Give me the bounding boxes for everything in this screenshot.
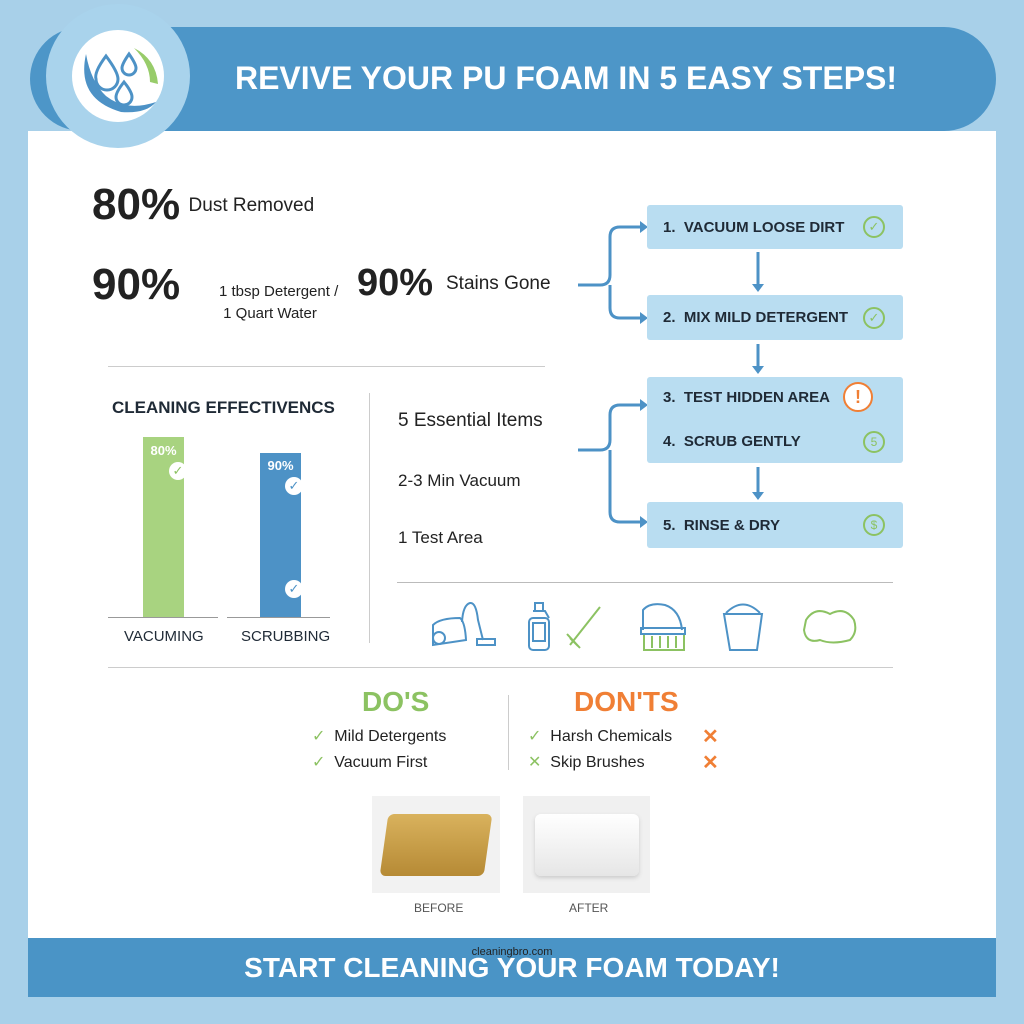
stat: dust removed: 80% Dust Removed (92, 180, 314, 229)
panel: do's: ✓ Vacuum First (312, 754, 427, 771)
chart: cleaning effectiveness: ✓ (173, 463, 183, 478)
flowchart: steps: 5 (871, 435, 877, 449)
panel: don'ts: ✕ (702, 752, 719, 774)
flowchart: steps: 3. TEST HIDDEN AREA (663, 389, 830, 406)
footer banner (28, 938, 996, 997)
flowchart: steps: $ (871, 518, 877, 532)
before/after images: BEFORE (414, 901, 463, 915)
chart: cleaning effectiveness: ✓ (289, 581, 299, 596)
chart: cleaning effectiveness: 80% (150, 443, 177, 458)
stat: detergent (92, 260, 551, 322)
panel: don'ts: DON'TS (574, 686, 679, 717)
chart: cleaning effectiveness: 90% (267, 458, 294, 473)
text: essentials (398, 410, 543, 547)
flowchart: steps: 2. MIX MILD DETERGENT (663, 309, 848, 326)
header banner (30, 27, 996, 131)
footer banner: cleaningbro.com (472, 946, 552, 958)
chart: cleaning effectiveness: ✓ (289, 478, 299, 493)
white panel (28, 131, 996, 940)
stat: detergent: Stains Gone (446, 273, 551, 294)
chart: cleaning effectiveness (108, 398, 335, 645)
flowchart: steps: 1. VACUUM LOOSE DIRT (663, 219, 844, 236)
flowchart: steps: 5. RINSE & DRY (663, 517, 780, 534)
icon: logo (46, 4, 190, 148)
panel: don'ts: ✓ Harsh Chemicals (528, 728, 672, 745)
stat: detergent: 1 tbsp Detergent / (219, 283, 338, 300)
stat: detergent: 90% (92, 260, 180, 309)
flowchart: steps: ! (855, 387, 861, 407)
stat: detergent: 90% (357, 262, 433, 304)
footer banner: START CLEANING YOUR FOAM TODAY! (244, 952, 780, 983)
text: essentials: 1 Test Area (398, 528, 483, 547)
flowchart: steps: 4. SCRUB GENTLY (663, 433, 801, 450)
before/after images: AFTER (569, 901, 608, 915)
chart: cleaning effectiveness: VACUMING (124, 628, 204, 645)
title: REVIVE YOUR PU FOAM IN 5 EASY STEPS! (235, 60, 897, 96)
before/after images (372, 796, 650, 915)
text: essentials: 5 Essential Items (398, 410, 543, 431)
panel: do's: DO'S (362, 686, 429, 717)
chart: cleaning effectiveness: CLEANING EFFECTIVENCS (112, 398, 335, 417)
text: essentials: 2-3 Min Vacuum (398, 471, 521, 490)
panel: do's: ✓ Mild Detergents (312, 728, 446, 745)
flowchart: steps (578, 205, 903, 548)
panel: don'ts: ✕ Skip Brushes (528, 754, 645, 771)
stat: detergent: 1 Quart Water (223, 305, 317, 322)
panel: don'ts (528, 686, 719, 774)
panel: do's (312, 686, 446, 771)
icons: supplies (432, 602, 856, 651)
flowchart: steps: ✓ (869, 310, 879, 325)
flowchart: steps: ✓ (869, 219, 879, 234)
chart: cleaning effectiveness: SCRUBBING (241, 628, 330, 645)
panel: don'ts: ✕ (702, 726, 719, 748)
